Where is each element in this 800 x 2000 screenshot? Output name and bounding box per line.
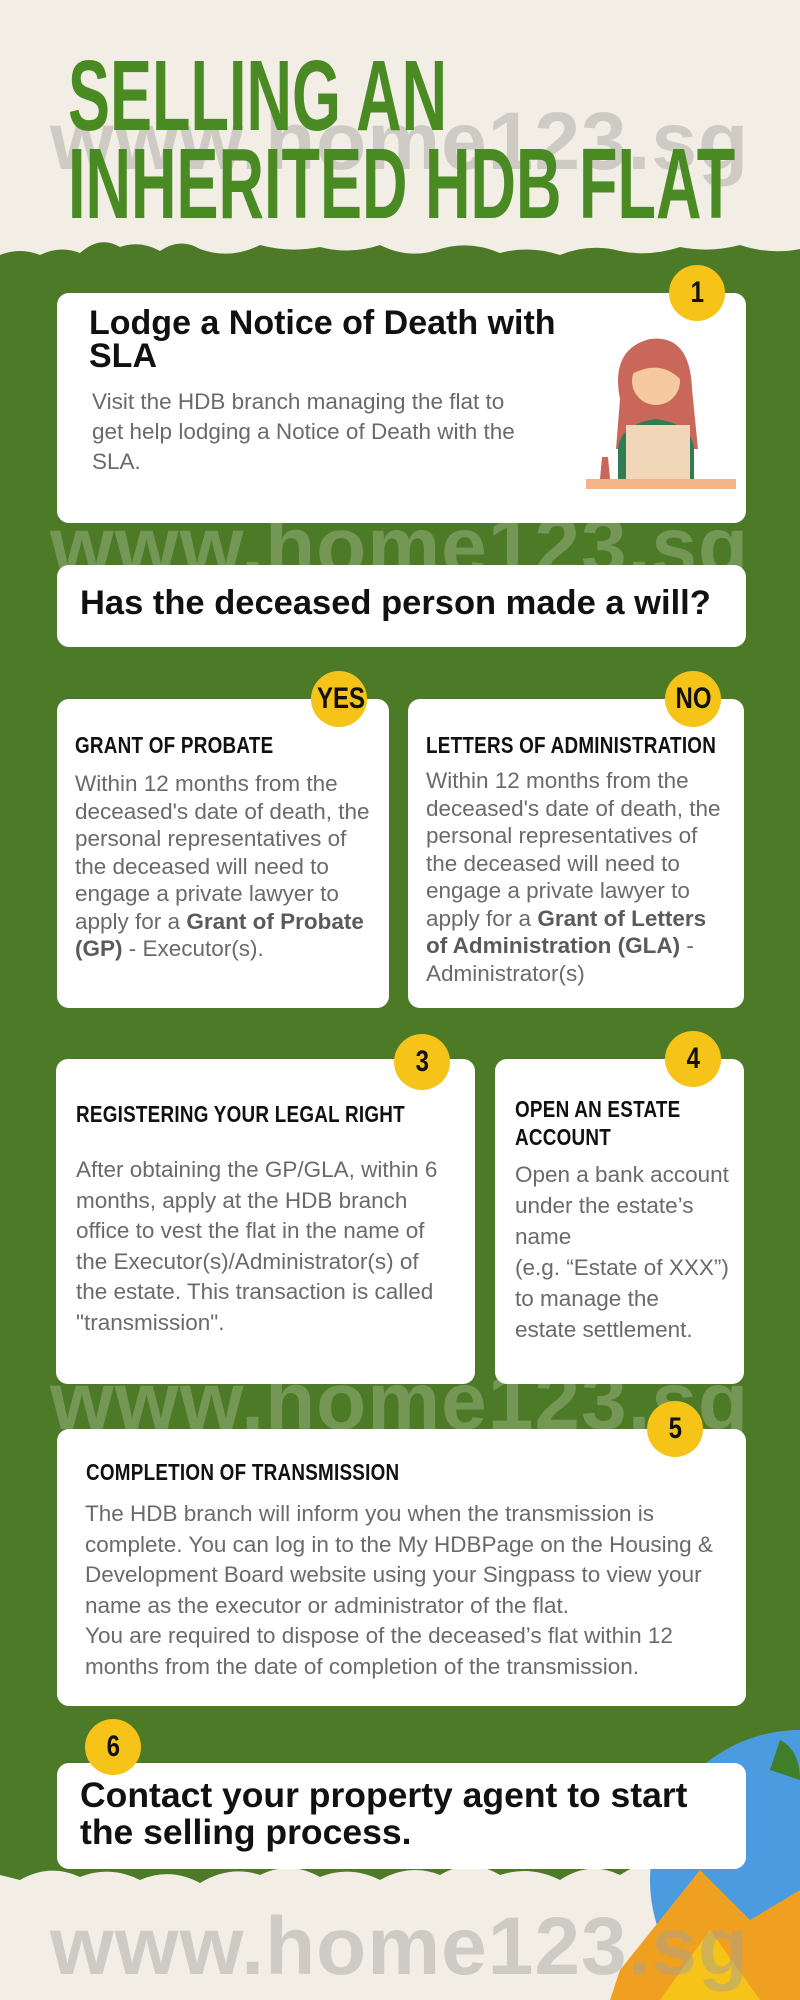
step 4 heading <box>515 1096 681 1150</box>
badge no: NO <box>675 682 711 715</box>
panel: question <box>57 565 746 647</box>
step 3 text <box>76 1157 437 1335</box>
step 1 heading: Lodge a Notice of Death with SLA <box>89 304 556 375</box>
no text: Administrator(s) <box>426 960 585 986</box>
step 6 text: Contact your property agent to start <box>80 1775 688 1815</box>
badge 6 <box>85 1719 141 1775</box>
step 5 text: The HDB branch will inform you when the transmission is <box>85 1501 654 1526</box>
step 4 text: name <box>515 1224 571 1249</box>
title: INHERITED HDB FLAT <box>68 128 735 240</box>
step 1 text: SLA. <box>92 449 141 474</box>
step 6 text <box>80 1775 688 1852</box>
step 4 text: under the estate’s <box>515 1193 693 1218</box>
no text: Within 12 months from the <box>426 768 689 793</box>
watermark top: www.home123.sg <box>50 96 749 187</box>
step 3 text: office to vest the flat in the name of <box>76 1218 425 1243</box>
step 4 heading: ACCOUNT <box>515 1124 611 1150</box>
panel: step 3 <box>56 1059 475 1384</box>
step 3 text: months, apply at the HDB branch <box>76 1188 407 1213</box>
no text: the deceased will need to <box>426 850 680 876</box>
step 1 text: Visit the HDB branch managing the flat to <box>92 389 504 414</box>
no text: personal representatives of <box>426 823 697 848</box>
yes text: apply for a Grant of Probate <box>75 908 364 934</box>
title <box>68 40 735 240</box>
text: www.home123.sg <box>50 1356 749 1447</box>
yes text: Within 12 months from the <box>75 771 338 796</box>
step 4 text: (e.g. “Estate of XXX”) <box>515 1255 729 1280</box>
no text <box>426 768 721 986</box>
no text: deceased's date of death, the <box>426 796 721 820</box>
badge 3: 3 <box>415 1045 429 1078</box>
badge no <box>665 671 721 727</box>
step 5 text: name as the executor or administrator of the flat. <box>85 1593 569 1618</box>
badge 5 <box>647 1401 703 1457</box>
badge 4: 4 <box>686 1042 700 1075</box>
step 5 text: months from the date of completion of the transmission. <box>85 1654 639 1679</box>
panel: step 1 <box>57 293 746 523</box>
yes heading: GRANT OF PROBATE <box>75 732 273 758</box>
step 5 heading: COMPLETION OF TRANSMISSION <box>86 1459 399 1485</box>
panel: step 6 <box>57 1763 746 1869</box>
yes text: deceased's date of death, the <box>75 798 370 824</box>
badge 1: 1 <box>690 276 704 309</box>
step 4 text <box>515 1162 729 1342</box>
title: SELLING AN <box>68 40 447 152</box>
step 3 text: After obtaining the GP/GLA, within 6 <box>76 1157 437 1182</box>
step 3 text: "transmission". <box>76 1310 225 1335</box>
step 4 text: estate settlement. <box>515 1317 693 1342</box>
step 6 text: the selling process. <box>80 1812 411 1852</box>
step 3 heading: REGISTERING YOUR LEGAL RIGHT <box>76 1101 405 1127</box>
step 4 text: to manage the <box>515 1286 659 1311</box>
step 5 text <box>85 1501 713 1679</box>
question heading: Has the deceased person made a will? <box>80 584 711 622</box>
step 1 text <box>92 389 515 474</box>
badge yes <box>311 671 367 727</box>
step 3 text: the Executor(s)/Administrator(s) of <box>76 1249 419 1274</box>
badge 5: 5 <box>668 1412 682 1445</box>
badge 4 <box>665 1031 721 1087</box>
step 1 text: get help lodging a Notice of Death with the <box>92 419 515 444</box>
watermarks on green: www.home123.sg <box>50 501 749 592</box>
step 4 heading: OPEN AN ESTATE <box>515 1096 681 1122</box>
badge 6: 6 <box>106 1730 120 1763</box>
panel: no letters of administration <box>408 699 744 1008</box>
yes text: the deceased will need to <box>75 854 329 878</box>
globe illustration <box>610 1730 800 2000</box>
no heading: LETTERS OF ADMINISTRATION <box>426 732 716 758</box>
badge 3 <box>394 1034 450 1090</box>
badge 1 <box>669 265 725 321</box>
step 5 text: You are required to dispose of the deceased’s flat within 12 <box>85 1623 673 1648</box>
panel: step 5 <box>57 1429 746 1706</box>
step 3 text: the estate. This transaction is called <box>76 1279 433 1304</box>
step 5 text: Development Board website using your Singpass to view your <box>85 1562 702 1587</box>
badge yes: YES <box>317 682 365 715</box>
yes text: personal representatives of <box>75 826 346 851</box>
icon: woman with laptop <box>586 338 736 489</box>
no text: apply for a Grant of Letters <box>426 906 706 930</box>
step 4 text: Open a bank account <box>515 1162 729 1187</box>
no text: of Administration (GLA) - <box>426 933 694 958</box>
panel: yes grant of probate <box>57 699 389 1008</box>
step 5 text: complete. You can log in to the My HDBPage on the Housing & <box>85 1532 713 1557</box>
yes text: (GP) - Executor(s). <box>75 936 264 961</box>
no text: engage a private lawyer to <box>426 878 690 903</box>
yes text <box>75 771 370 961</box>
yes text: engage a private lawyer to <box>75 881 339 906</box>
panel: step 4 <box>495 1059 744 1384</box>
watermark bottom: www.home123.sg <box>50 1901 749 1992</box>
